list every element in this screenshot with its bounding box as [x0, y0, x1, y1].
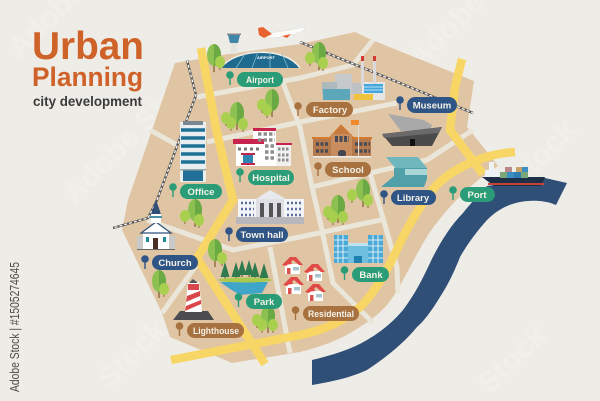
watermark: Stock [472, 319, 553, 400]
label: Town hall: Town hall [240, 230, 284, 241]
icon: plane [258, 27, 305, 38]
stock id text: Adobe Stock | #1505274645 [8, 262, 22, 392]
bank building [334, 235, 383, 263]
title [32, 25, 144, 109]
museum building [382, 114, 442, 146]
school building [312, 120, 372, 158]
library building [381, 157, 427, 187]
ship [482, 162, 545, 186]
factory building [322, 56, 385, 100]
label: Town hall [225, 227, 288, 242]
label: Lighthouse: Lighthouse [193, 326, 239, 337]
label: Bank: Bank [359, 270, 383, 281]
airport trees [207, 42, 328, 72]
title: Urban [32, 25, 144, 68]
label: Airport [226, 71, 283, 87]
lighthouse [173, 279, 214, 320]
label: Office: Office [188, 187, 214, 198]
label: Residential: Residential [308, 309, 354, 320]
river [312, 178, 567, 385]
label: Residential [292, 306, 359, 321]
label: Church [141, 255, 198, 270]
yellow main roads [171, 48, 515, 364]
title: city development [33, 94, 142, 109]
park with lake [218, 260, 272, 295]
label: Museum [396, 96, 457, 113]
railway [113, 42, 473, 228]
hospital building [233, 128, 292, 166]
label: Office [169, 183, 222, 199]
label: Park: Park [254, 297, 275, 308]
office building [180, 121, 206, 182]
church building [137, 200, 175, 250]
houses [282, 257, 326, 301]
label: Bank [341, 266, 389, 282]
label: Library [380, 190, 436, 205]
city land map [122, 32, 498, 363]
town hall building [236, 190, 304, 224]
label: Port [449, 186, 495, 202]
trees near park [208, 239, 278, 333]
airport building [221, 34, 300, 68]
label: Church: Church [158, 258, 192, 269]
watermark: Stock [92, 314, 173, 395]
label: Port: Port [468, 190, 487, 201]
watermark: Stock [502, 114, 583, 195]
label: Museum: Museum [413, 100, 451, 112]
label: Hospital [236, 168, 294, 185]
trees upper left [221, 89, 279, 132]
title: Planning [32, 62, 143, 92]
airport building: AIRPORT [257, 55, 276, 60]
label: School: School [332, 165, 364, 176]
label: Factory [294, 102, 353, 117]
trees near church [152, 270, 169, 298]
label: Airport: Airport [246, 75, 275, 86]
label: School [314, 162, 371, 177]
label: Lighthouse [176, 322, 244, 338]
label: Park [235, 293, 282, 309]
light streets [147, 40, 473, 353]
trees near school [323, 179, 373, 225]
trees near office [180, 199, 204, 228]
watermark: Adobe Stock [57, 57, 210, 210]
label: Hospital: Hospital [252, 173, 290, 184]
label: Factory: Factory [313, 105, 348, 116]
label: Library: Library [397, 193, 430, 204]
